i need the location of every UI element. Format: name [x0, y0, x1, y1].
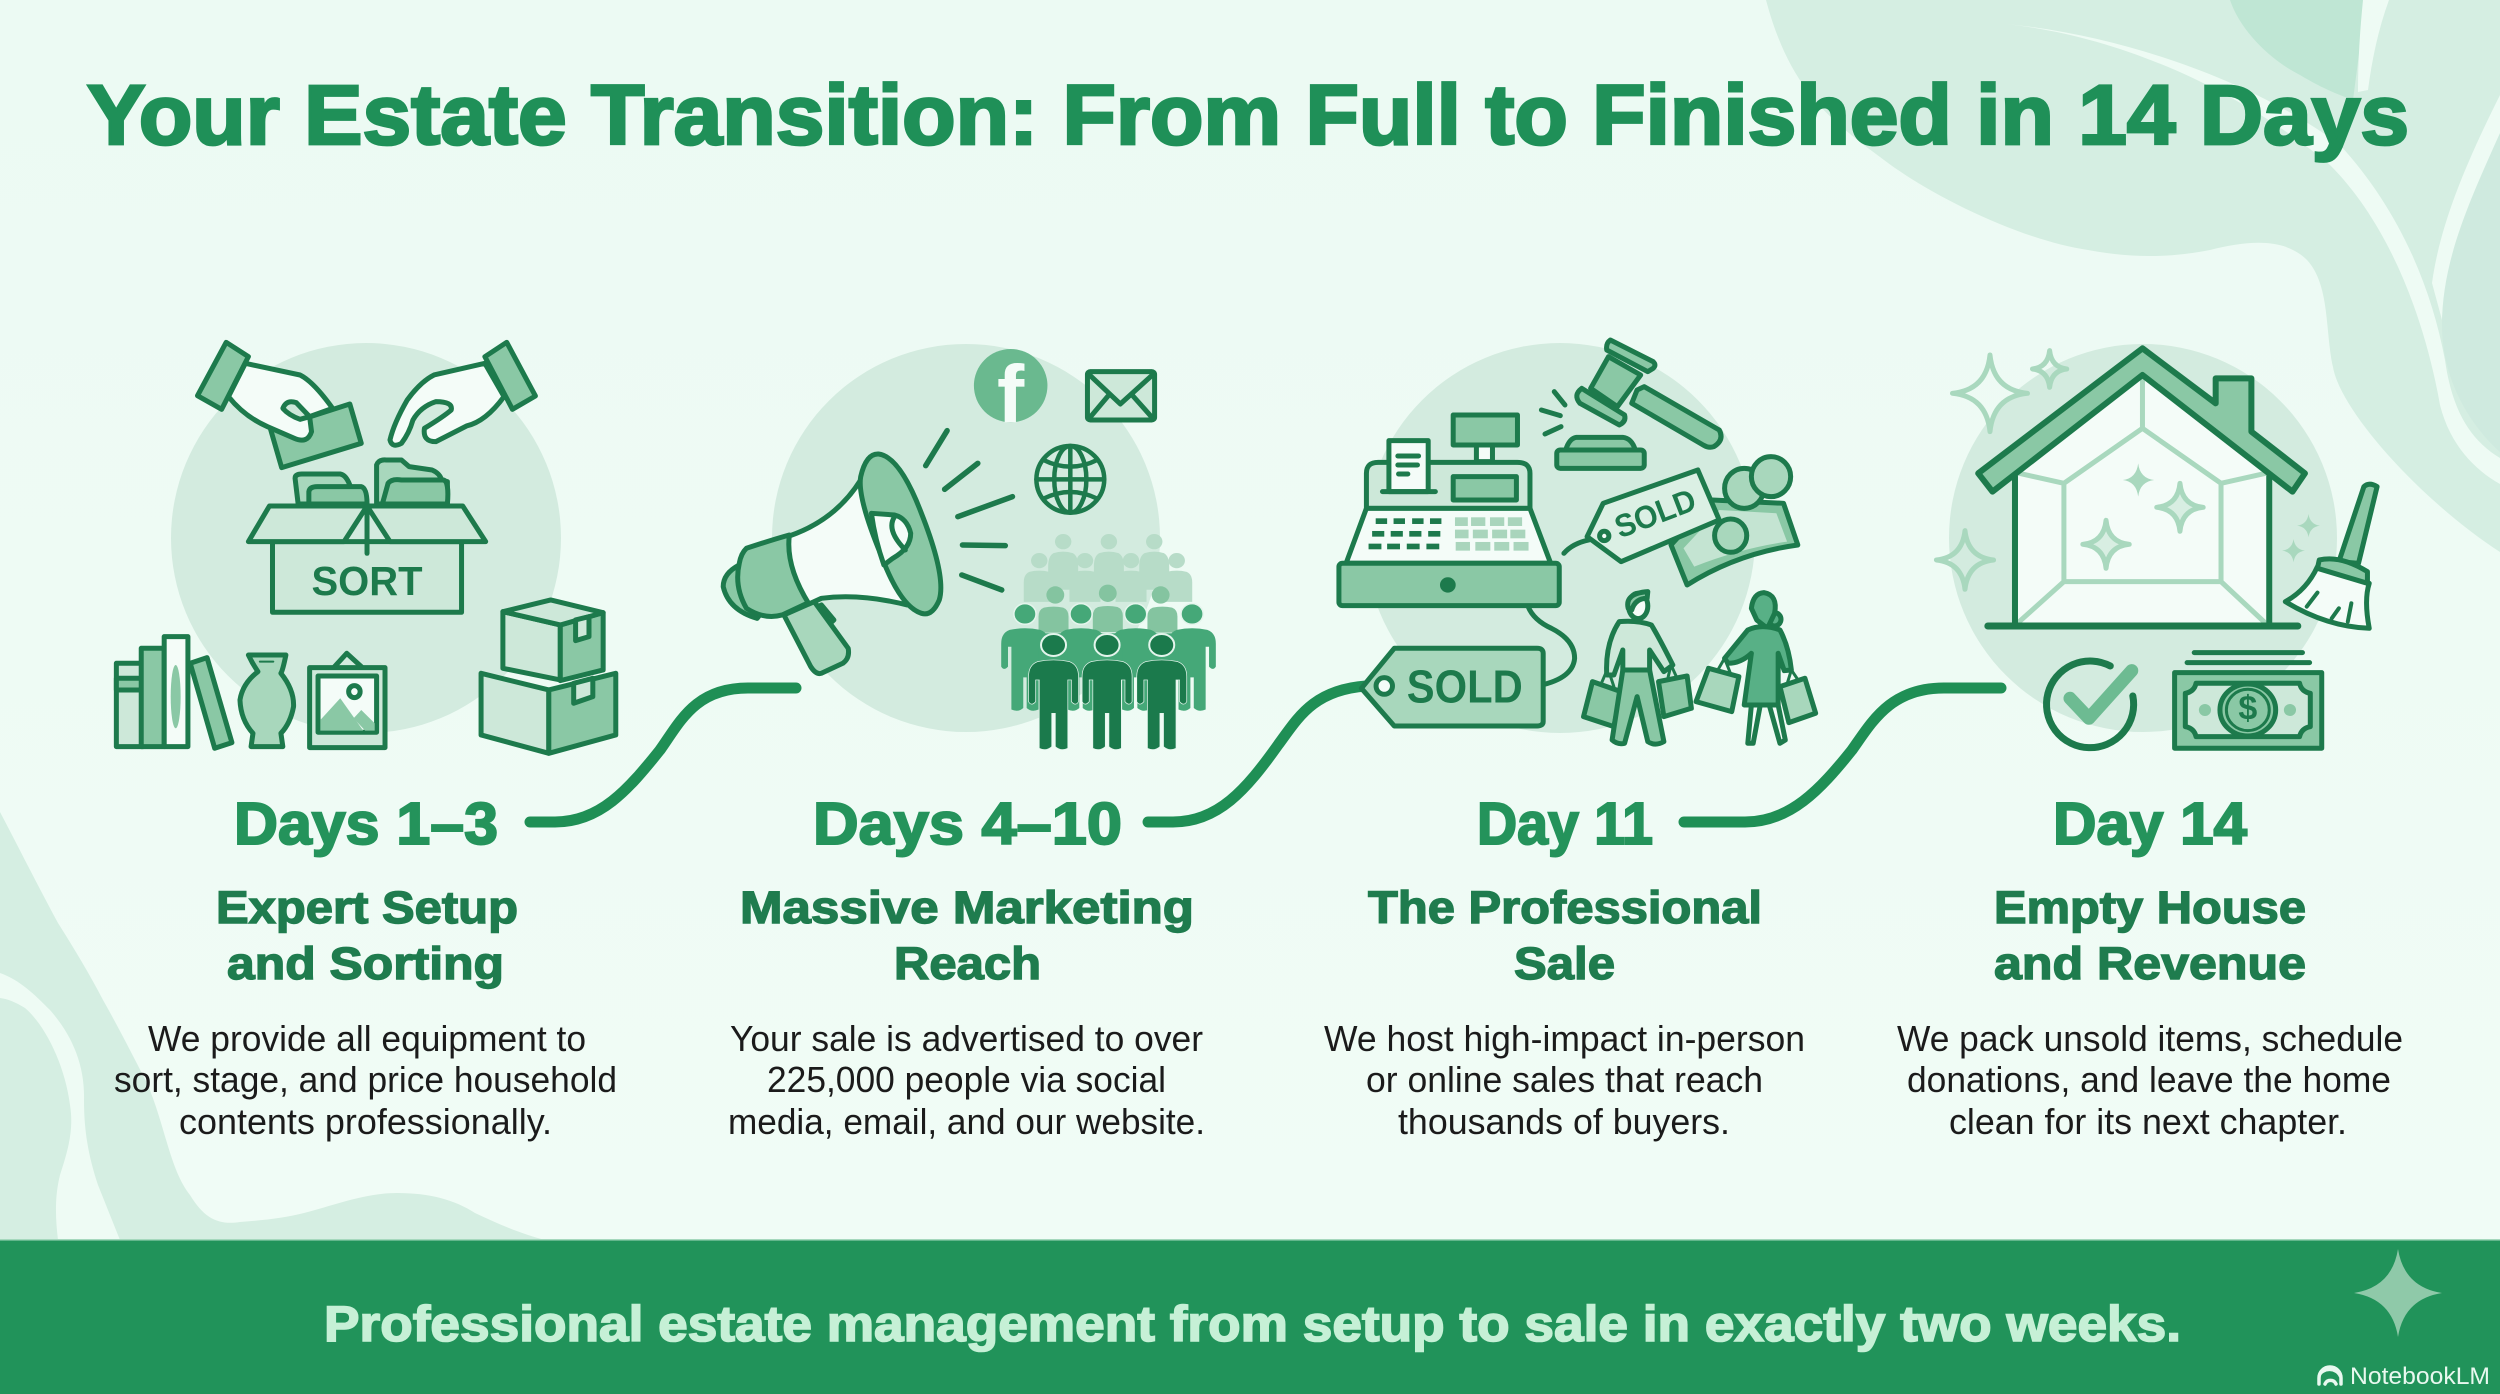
step 2 description — [728, 1018, 1205, 1142]
step 3 description: or online sales that reach — [1366, 1059, 1763, 1100]
step 4 heading: Empty House — [1994, 882, 2306, 933]
icon group: register, gavel, sold tags, shoppers — [1339, 340, 1816, 744]
step 4 description: clean for its next chapter. — [1949, 1101, 2347, 1142]
step 2 heading: Massive Marketing — [740, 882, 1194, 933]
icon: small SOLD tag — [1564, 470, 1719, 562]
step 2 day label: Days 4–10 — [813, 791, 1122, 857]
icon: books — [116, 637, 232, 748]
step 4 description — [1897, 1018, 2403, 1142]
icon: crowd of people — [1001, 534, 1216, 750]
background blob: bottom left — [0, 812, 545, 1240]
icon: left hand — [197, 342, 333, 440]
step 4 text — [1897, 791, 2403, 1142]
step 3 heading: Sale — [1514, 938, 1615, 989]
footer band — [0, 1239, 2500, 1394]
icon: framed picture — [310, 653, 385, 748]
step 4 description: We pack unsold items, schedule — [1897, 1018, 2403, 1059]
step 2 text — [728, 791, 1205, 1142]
icon: check mark in circle — [2047, 661, 2134, 748]
icon: male shopper with bags — [1584, 592, 1691, 744]
background circle: step 2 — [772, 344, 1160, 732]
icon: facebook circle — [974, 349, 1047, 441]
background circle: step 3 — [1365, 343, 1755, 733]
middle row of people — [1039, 585, 1177, 633]
footer summary text: Professional estate management from setup to sale in exactly two weeks. — [324, 1296, 2181, 1352]
second row of people — [1001, 604, 1216, 711]
step 1 heading — [216, 882, 518, 989]
NotebookLM wordmark: NotebookLM — [2350, 1363, 2490, 1390]
step 3 text — [1324, 791, 1805, 1142]
step 2 description: 225,000 people via social — [767, 1059, 1166, 1100]
icon: folders in box — [295, 460, 448, 504]
icon: large SOLD tag — [1361, 648, 1543, 726]
icon: globe — [1036, 446, 1104, 513]
icon: facebook circle: f — [997, 350, 1025, 441]
icon: vase — [240, 655, 294, 747]
keypad: dark keys — [1369, 518, 1441, 549]
step 4 day label: Day 14 — [2053, 791, 2247, 857]
icon: folder held by left hand — [271, 404, 361, 468]
step 1 description: We provide all equipment to — [148, 1018, 586, 1059]
step 1 heading: and Sorting — [227, 938, 504, 989]
icon: email envelope — [1087, 372, 1155, 420]
icon: open SORT box: SORT — [312, 558, 423, 604]
icon: large SOLD tag: SOLD — [1407, 661, 1523, 713]
front row of people — [1029, 634, 1187, 750]
icon: sparkles around house — [1936, 351, 2067, 589]
connector: step 1 to step 2 — [530, 688, 796, 822]
icon: right hand — [390, 342, 535, 445]
icon group: sorting box, hands, household items — [116, 342, 616, 753]
icon: coins and banknote — [1671, 457, 1798, 585]
step 3 description: thousands of buyers. — [1398, 1101, 1730, 1142]
icon: megaphone — [723, 454, 941, 674]
icon: stacked moving boxes — [481, 600, 616, 753]
connector: step 3 to step 4 — [1684, 688, 2001, 822]
icon: female shopper with bags — [1696, 593, 1816, 743]
step 1 description: contents professionally. — [179, 1101, 552, 1142]
background blob: top right — [1766, 0, 2500, 552]
keypad: light keys — [1455, 517, 1529, 551]
icon: small sparkles by broom — [2282, 514, 2320, 562]
step 2 heading: Reach — [894, 938, 1041, 989]
icon: stack of cash — [2175, 653, 2322, 748]
step 3 description: We host high-impact in-person — [1324, 1018, 1805, 1059]
icon group: clean empty house, broom, check, cash — [1936, 348, 2377, 748]
step 2 heading — [740, 882, 1194, 989]
icon: empty house — [1978, 348, 2305, 626]
back row of people — [1024, 534, 1192, 602]
step 2 description: media, email, and our website. — [728, 1101, 1205, 1142]
step 1 text — [114, 791, 617, 1142]
step 1 day label: Days 1–3 — [234, 791, 498, 857]
step 1 description — [114, 1018, 617, 1142]
icon: small SOLD tag: SOLD — [1610, 481, 1701, 545]
step 4 heading: and Revenue — [1994, 938, 2306, 989]
title: Your Estate Transition: From Full to Finished in 14 Days — [87, 68, 2409, 162]
step 2 description: Your sale is advertised to over — [730, 1018, 1203, 1059]
step 1 heading: Expert Setup — [216, 882, 518, 933]
step 3 heading: The Professional — [1368, 882, 1762, 933]
step 4 description: donations, and leave the home — [1907, 1059, 2391, 1100]
connector: step 2 to step 3 — [1148, 686, 1366, 822]
icon: gavel and block — [1541, 340, 1721, 468]
icon: sound rays — [926, 431, 1012, 590]
step 3 description — [1324, 1018, 1805, 1142]
icon group: megaphone, channels, crowd — [723, 349, 1216, 750]
icon: stack of cash: $ — [2238, 689, 2257, 727]
step 4 heading — [1994, 882, 2306, 989]
step 3 day label: Day 11 — [1477, 791, 1653, 857]
step 3 heading — [1368, 882, 1762, 989]
background circle: step 4 — [1949, 344, 2337, 732]
icon: footer sparkle — [2354, 1249, 2442, 1337]
icon: NotebookLM logo — [2319, 1367, 2341, 1384]
step 1 description: sort, stage, and price household — [114, 1059, 617, 1100]
icon: open SORT box — [248, 506, 486, 612]
icon: cash register — [1339, 415, 1575, 687]
icon: broom — [2285, 484, 2377, 628]
background circle: step 1 — [171, 343, 561, 733]
